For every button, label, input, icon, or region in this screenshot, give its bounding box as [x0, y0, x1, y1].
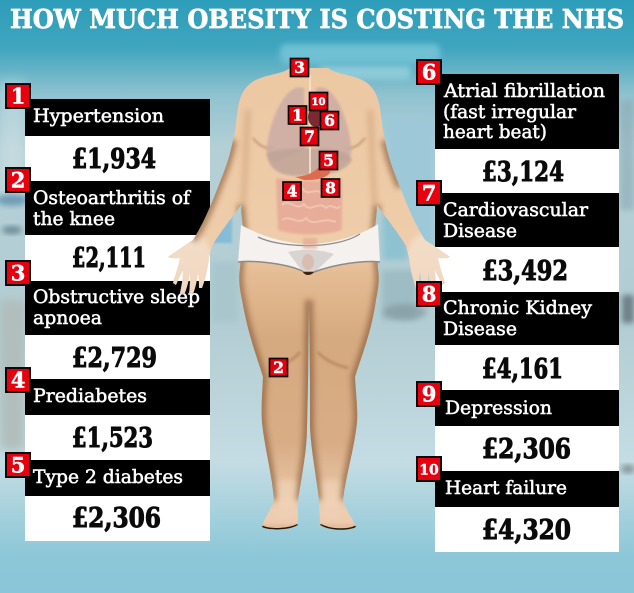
panel: type 2 diabetes: £2,306 — [72, 503, 161, 534]
badge: left 4 — [6, 368, 30, 392]
intestines — [276, 178, 342, 234]
panel: atrial fibrillation: £3,124 — [482, 157, 564, 188]
badge: right 10 — [417, 457, 441, 481]
panel: prediabetes — [25, 379, 210, 460]
badge: left 5 — [6, 452, 30, 478]
badge: right 6: 6 — [422, 60, 436, 84]
badge: right 9: 9 — [422, 382, 436, 406]
marker: body 3 — [290, 58, 308, 77]
badge: left 4: 4 — [11, 368, 25, 392]
marker: body 8: 8 — [325, 178, 336, 198]
panel: osteoarthritis: the knee — [33, 209, 115, 230]
panel: atrial fibrillation: Atrial fibrillation — [443, 81, 605, 102]
panel: osteoarthritis: Osteoarthritis of — [33, 188, 191, 209]
marker: body 4: 4 — [287, 182, 298, 200]
marker: body 2: 2 — [273, 358, 284, 377]
panel: hypertension: Hypertension — [33, 106, 164, 127]
badge: left 2: 2 — [11, 168, 25, 192]
panel: obstructive sleep apnoea — [25, 281, 210, 379]
panel: cardiovascular disease — [435, 193, 619, 292]
panel: cardiovascular disease: Cardiovascular — [443, 200, 588, 221]
panel: atrial fibrillation — [435, 74, 619, 193]
badge: left 3: 3 — [11, 260, 25, 286]
badge: right 9 — [417, 382, 441, 406]
panel: depression: £2,306 — [482, 434, 571, 465]
marker: body 1: 1 — [292, 106, 303, 124]
marker: body 7: 7 — [304, 127, 315, 146]
panel: chronic kidney disease: Chronic Kidney — [443, 298, 593, 319]
marker: body 6: 6 — [324, 111, 335, 130]
badge: right 6 — [417, 60, 441, 84]
badge: left 1: 1 — [11, 84, 25, 108]
chest folds — [253, 138, 365, 148]
panel: type 2 diabetes: Type 2 diabetes — [33, 467, 183, 488]
spine — [309, 75, 311, 175]
panel: chronic kidney disease: £4,161 — [482, 354, 563, 385]
heart — [308, 107, 324, 127]
panel: prediabetes: £1,523 — [72, 423, 153, 454]
panel: hypertension — [25, 99, 210, 181]
marker: body 10 — [310, 92, 328, 110]
badge: right 7 — [417, 180, 441, 206]
stomach — [295, 162, 330, 180]
liver and lower organs — [267, 148, 352, 176]
badge: right 10: 10 — [419, 462, 439, 478]
panel: heart failure: £4,320 — [482, 515, 571, 546]
panel: depression: Depression — [445, 398, 552, 419]
panel: chronic kidney disease: Disease — [443, 319, 517, 340]
marker: body 5 — [320, 151, 338, 170]
marker: body 1 — [288, 106, 306, 124]
panel: hypertension: £1,934 — [72, 144, 156, 175]
panel: osteoarthritis — [25, 181, 210, 281]
panel: type 2 diabetes — [25, 460, 210, 541]
marker: body 5: 5 — [323, 151, 334, 170]
marker: body 3: 3 — [294, 58, 305, 77]
panel: chronic kidney disease — [435, 292, 619, 390]
panel: cardiovascular disease: Disease — [443, 221, 517, 242]
organs — [253, 75, 365, 234]
panel: heart failure: Heart failure — [445, 478, 567, 499]
marker: body 7 — [300, 127, 318, 146]
panel: atrial fibrillation: heart beat) — [443, 122, 547, 143]
badge: right 8: 8 — [422, 282, 436, 306]
panel: depression — [435, 390, 619, 471]
badge: right 8 — [417, 282, 441, 306]
marker: body 2 — [270, 358, 288, 377]
marker: body 6 — [320, 111, 338, 130]
lungs — [267, 87, 305, 162]
badge: left 2 — [6, 168, 30, 192]
panel: atrial fibrillation: (fast irregular — [443, 102, 576, 123]
badge: left 3 — [6, 260, 30, 286]
illustration: human body with organs — [160, 60, 460, 540]
marker: body 8 — [322, 178, 340, 198]
panel: heart failure — [435, 471, 619, 552]
badge: left 1 — [6, 84, 30, 108]
marker: body 4 — [283, 182, 301, 200]
marker: body 10: 10 — [312, 97, 325, 108]
panel: osteoarthritis: £2,111 — [72, 243, 146, 274]
panel: cardiovascular disease: £3,492 — [482, 256, 568, 287]
badge: right 7: 7 — [422, 180, 436, 206]
panel: obstructive sleep apnoea: Obstructive sleep — [33, 287, 200, 308]
panel: left cost list — [25, 99, 210, 541]
panel: right cost list — [435, 74, 619, 552]
panel: obstructive sleep apnoea: £2,729 — [72, 343, 157, 374]
badge: left 5: 5 — [11, 452, 25, 478]
underwear — [238, 224, 380, 275]
panel: obstructive sleep apnoea: apnoea — [33, 308, 102, 329]
panel: prediabetes: Prediabetes — [33, 386, 147, 407]
